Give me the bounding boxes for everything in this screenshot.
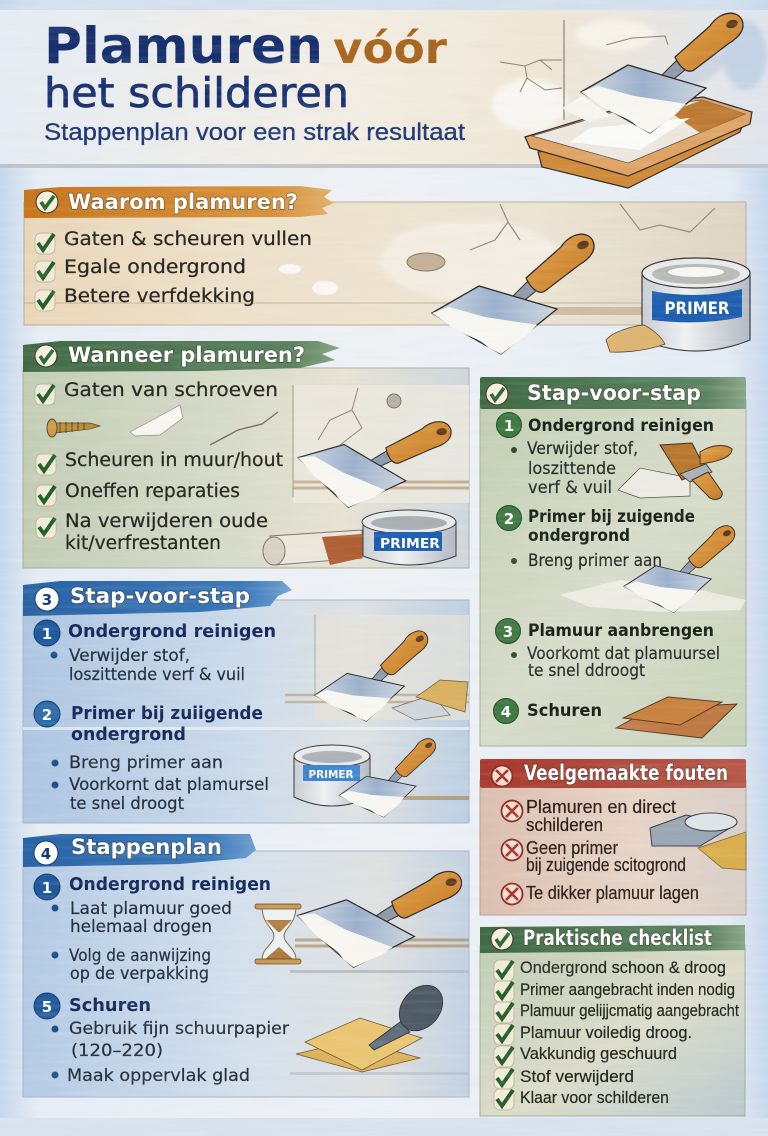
heading: veelgemaakte fouten — [480, 759, 746, 788]
step 1: drogen: 1 — [42, 879, 52, 897]
plaster patches behind tray — [492, 20, 767, 131]
panel: praktische checklist — [480, 925, 745, 1116]
step 1: drogen: Ondergrond reinigen — [69, 874, 271, 895]
step 1: drogen: helemaal drogen — [70, 917, 212, 936]
checklist items: Plamuur voiledig droog. — [520, 1023, 692, 1042]
list: wanneer: Gaten van schroeven — [64, 380, 278, 401]
icon: hourglass — [255, 904, 301, 964]
step 2: ondergrond — [528, 526, 630, 546]
step 1: Ondergrond reinigen — [528, 416, 714, 436]
panel: title banner — [0, 10, 768, 188]
heading: stappenplan: Stappenplan — [71, 835, 222, 859]
list: waarom — [35, 229, 312, 311]
icon: trowel — [621, 525, 739, 615]
step 1: drogen: Volg de aanwijzing — [69, 946, 211, 965]
step 5: schuren: Schuren — [69, 995, 151, 1016]
heading: stap-voor-stap — [480, 377, 746, 409]
plaster smear — [560, 580, 746, 612]
heading: stap 3 — [23, 581, 292, 616]
step 1: verf & vuil — [528, 478, 612, 497]
wall detail — [285, 615, 469, 798]
icon: sanding sponge — [392, 680, 468, 720]
panel: stappenplan — [23, 834, 469, 1097]
checklist items: Ondergrond schoon & droog — [520, 958, 726, 977]
step 3 — [496, 618, 720, 680]
list: wanneer — [35, 380, 283, 554]
wall texture — [24, 204, 746, 315]
step 1: 1 — [42, 625, 52, 643]
icon: sandpaper and dust blower — [296, 977, 452, 1072]
panel: waarom plamuren — [24, 186, 750, 354]
step 3: 3 — [503, 623, 513, 641]
heading: praktische checklist — [480, 925, 745, 953]
step 3: te snel ddroogt — [528, 661, 645, 680]
step 2: 2 — [504, 510, 514, 528]
icon: plaster tray — [525, 97, 752, 188]
step 4 — [494, 698, 602, 724]
list: wanneer: kit/verfrestanten — [65, 533, 221, 554]
icon: primer can: PRIMER — [664, 299, 730, 319]
step 2: te snel droogt — [70, 794, 185, 813]
icon: paint brush and cloth — [618, 443, 732, 499]
step 2: Primer bij zuigende — [528, 507, 695, 527]
step 1: drogen: Laat plamuur goed — [70, 899, 232, 918]
checklist items: Klaar voor schilderen — [520, 1088, 669, 1107]
icon: trowel with plaster — [581, 13, 743, 133]
icon: primer can — [294, 745, 370, 806]
list: wanneer: Na verwijderen oude — [65, 511, 268, 532]
step 5: schuren: (120–220) — [71, 1041, 163, 1060]
step 1: loszittende verf & vuil — [69, 665, 245, 684]
icon: sponge — [606, 325, 665, 352]
step 5: schuren — [34, 993, 289, 1085]
icon: primer tin: PRIMER — [380, 537, 440, 552]
icon: screw — [47, 419, 100, 437]
list: fouten: schilderen — [526, 815, 603, 835]
checklist items — [494, 958, 739, 1110]
step 2 — [34, 701, 269, 813]
title line 2: het schilderen — [44, 69, 349, 117]
step 2: ondergrond — [71, 724, 186, 745]
ledge detail — [290, 940, 469, 1075]
step 1: Ondergrond reinigen — [68, 621, 276, 642]
icon: filler tube — [263, 530, 362, 565]
heading: stappenplan — [23, 834, 256, 867]
icon: trowel — [311, 630, 433, 725]
title line 1 — [44, 17, 448, 75]
icon: trowel small — [335, 738, 441, 821]
step 2: Voorkornt dat plamursel — [69, 775, 269, 794]
heading: stap 3: 3 — [42, 591, 52, 609]
panel: stap-voor-stap groen — [480, 377, 746, 746]
panel: wanneer plamuren — [23, 341, 469, 568]
heading: stap 3: Stap-voor-stap — [70, 584, 250, 608]
step 3: Plamuur aanbrengen — [528, 621, 714, 641]
step 2 — [496, 506, 695, 570]
icon: primer can — [642, 258, 750, 351]
step 2: Breng primer aan — [528, 551, 662, 570]
list: wanneer: Scheuren in muur/hout — [65, 450, 283, 471]
wall cracks — [500, 20, 668, 120]
list: fouten — [502, 797, 699, 904]
checklist items: Stof verwijderd — [520, 1067, 634, 1086]
list: fouten: bij zuigende scitogrond — [526, 855, 686, 875]
heading: praktische checklist: Praktische checklist — [523, 926, 712, 950]
panel: veelgemaakte fouten — [480, 759, 746, 915]
panel: stap-voor-stap blauw — [23, 581, 469, 823]
heading: wanneer plamuren — [23, 341, 340, 372]
step 2: Primer bij zuiigende — [71, 703, 263, 724]
step 1 — [496, 412, 714, 497]
step 2: Breng primer aan — [69, 753, 223, 772]
step 1: Verwijder stof, — [527, 439, 638, 458]
icon: trowel — [289, 390, 453, 527]
heading: stap-voor-stap: Stap-voor-stap — [527, 381, 701, 405]
heading: wanneer plamuren: Wanneer plamuren? — [68, 343, 305, 367]
list: waarom: Betere verfdekking — [64, 286, 255, 307]
icon: sandpaper sheets — [616, 697, 737, 738]
step 3: Voorkomt dat plamuursel — [527, 644, 720, 663]
step 2: 2 — [42, 706, 52, 724]
step 5: schuren: Gebruik fijn schuurpapier — [69, 1019, 289, 1038]
icon: trowel — [432, 234, 594, 354]
step 4: 4 — [501, 703, 511, 721]
list: fouten: Geen primer — [526, 838, 618, 858]
subtitle: Stappenplan voor een strak resultaat — [44, 119, 465, 146]
heading: waarom plamuren — [24, 186, 334, 218]
list: wanneer: Oneffen reparaties — [65, 481, 240, 502]
checklist items: Primer aangebracht inden nodig — [520, 980, 735, 999]
step 1: drogen: op de verpakking — [70, 964, 209, 983]
title line 1: Plamuren — [44, 17, 323, 75]
step 1: 1 — [504, 417, 514, 435]
icon: primer tin — [362, 510, 456, 565]
heading: waarom plamuren: Waarom plamuren? — [68, 190, 298, 214]
step 4: Schuren — [527, 701, 602, 721]
icon: trowel — [289, 842, 464, 986]
list: waarom: Gaten & scheuren vullen — [64, 229, 312, 250]
checklist items: Plamuur gelijjcmatig aangebracht — [520, 1001, 739, 1020]
checklist items: Vakkundig geschuurd — [520, 1044, 677, 1063]
list: waarom: Egale ondergrond — [64, 257, 246, 278]
step 1 — [34, 620, 276, 684]
list: fouten: Plamuren en direct — [526, 797, 676, 817]
heading: stappenplan: 4 — [41, 845, 51, 863]
step 5: schuren: Maak oppervlak glad — [67, 1066, 250, 1085]
list: fouten: Te dikker plamuur lagen — [526, 883, 699, 903]
title line 1: vóór — [333, 24, 448, 74]
step 1: drogen — [34, 874, 271, 983]
wall with cracks — [130, 385, 469, 503]
icon: primer can: PRIMER — [308, 768, 354, 781]
step 5: schuren: 5 — [42, 998, 52, 1016]
icon: scraper tool and sponge — [650, 813, 746, 870]
step 1: loszittende — [528, 459, 616, 478]
step 1: Verwijder stof, — [69, 646, 190, 665]
